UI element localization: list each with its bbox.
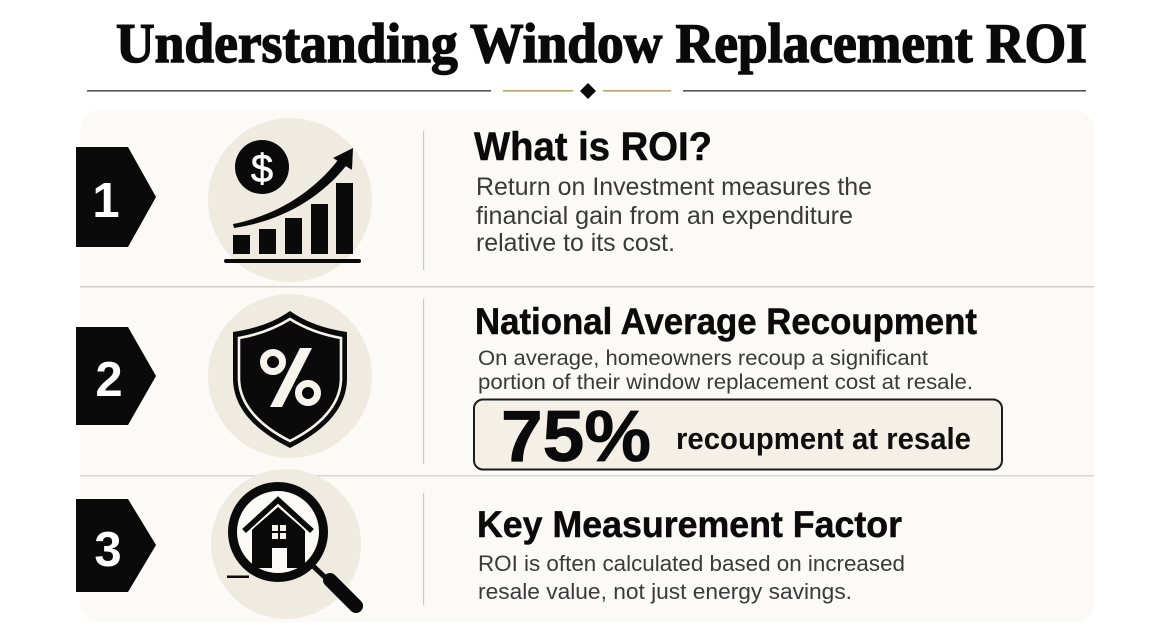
icon: dollar and rising bar chart	[208, 118, 372, 282]
number badge 2	[76, 327, 156, 425]
icon: dollar and rising bar chart: $	[251, 147, 273, 191]
text block: financial gain from an expenditure	[476, 202, 853, 230]
panel: what is ROI	[76, 118, 872, 282]
title divider with diamond	[87, 83, 1086, 99]
callout: 75% recoupment: recoupment at resale	[676, 421, 971, 456]
heading: What is ROI?	[474, 125, 712, 169]
text block	[478, 551, 905, 604]
text block: resale value, not just energy savings.	[478, 579, 852, 604]
heading: National Average Recoupment	[475, 301, 977, 342]
text block: Return on Investment measures the	[476, 173, 872, 201]
text block: ROI is often calculated based on increased	[478, 551, 905, 576]
number badge 3	[76, 499, 156, 592]
callout: 75% recoupment	[474, 397, 1002, 477]
panel: background card	[80, 110, 1094, 622]
number badge 1: 1	[92, 174, 120, 228]
text block	[476, 173, 872, 257]
text block: portion of their window replacement cost at resale.	[478, 371, 973, 394]
panel: national average recoupment	[76, 294, 1002, 477]
heading: Key Measurement Factor	[477, 504, 902, 545]
text block: On average, homeowners recoup a significant	[478, 347, 928, 370]
text block: relative to its cost.	[476, 229, 675, 257]
title: Understanding Window Replacement ROI	[116, 13, 1087, 75]
panel: key measurement factor	[76, 469, 905, 619]
number badge 3: 3	[94, 523, 122, 577]
number badge 2: 2	[95, 353, 123, 407]
text block	[478, 347, 973, 394]
icon: house under magnifying glass	[211, 469, 361, 619]
icon: percent shield	[208, 294, 372, 458]
number badge 1	[76, 147, 156, 247]
callout: 75% recoupment: 75%	[501, 397, 651, 477]
